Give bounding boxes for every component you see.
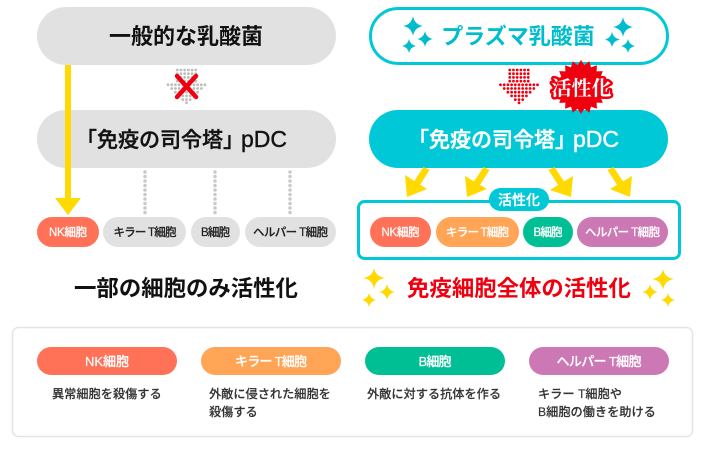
legend: killer T cell: 殺傷する [209,404,258,419]
cell pills: partial activation [37,217,336,247]
pill: helper T cell: ヘルパー T細胞 [253,225,328,239]
pill: helper T cell [245,217,336,247]
pill: NK cell [37,217,99,247]
pill: helper T cell: ヘルパー T細胞 [585,225,660,239]
pill: pDC activated: pDC [573,126,619,152]
result heading: whole activation: 免疫細胞全体の活性化 [407,276,631,301]
heading pill: plasma lactic acid bacteria: プラズマ乳酸菌 [441,24,595,49]
legend: killer T cell: 外敵に侵された細胞を [209,386,331,401]
pill: pDC: 「免疫の司令塔」 [76,129,244,152]
legend: helper T cell: B細胞の働きを助ける [538,404,656,419]
legend: NK cell: NK細胞 [85,354,129,369]
pill: pDC activated [369,110,668,168]
pill: killer T cell [436,217,519,247]
badge: activation starburst [552,60,612,114]
heading pill: general lactic acid bacteria: 一般的な乳酸菌 [109,24,263,49]
arrows: yellow arrows to cells [405,167,632,197]
legend: B cell: B細胞 [418,354,452,369]
legend: helper T cell: キラー T細胞や [538,386,622,401]
pill: NK cell: NK細胞 [382,225,420,239]
legend: killer T cell: キラー T細胞 [235,354,307,369]
pill: B cell: B細胞 [534,225,563,239]
label: activated [489,188,549,211]
arrow: yellow arrow to NK cell [55,65,81,215]
icon: sparkles left [402,16,433,53]
pill: pDC [37,110,336,168]
panel: general lactic acid bacteria [37,7,336,301]
result heading: partial activation: 一部の細胞のみ活性化 [74,276,298,301]
pill: NK cell: NK細胞 [49,225,88,239]
frame: activated cells [358,188,680,258]
legend: helper T cell: ヘルパー T細胞 [556,354,642,369]
pill: pDC: pDC [241,126,287,152]
legend: NK cell [37,347,177,401]
legend: B cell [365,347,505,401]
icon: red dotted arrow [500,70,538,103]
legend: NK cell: 異常細胞を殺傷する [52,386,162,401]
label: activated: 活性化 [498,192,540,208]
icon: yellow sparkles right [642,269,675,307]
heading pill: plasma lactic acid bacteria [370,8,668,64]
heading pill: general lactic acid bacteria [37,7,336,65]
badge: activation starburst: 活性化 [552,77,612,100]
pill: NK cell [370,217,431,247]
pill: pDC activated: 「免疫の司令塔」 [408,129,576,152]
panel: plasma lactic acid bacteria [358,8,680,307]
icon: sparkles right [605,17,635,53]
legend: B cell: 外敵に対する抗体を作る [367,386,501,401]
pill: helper T cell [577,217,668,247]
pill: B cell [191,217,240,247]
pill: B cell: B細胞 [201,225,230,239]
panel: legend [12,328,692,436]
pill: killer T cell [103,217,186,247]
pill: killer T cell: キラー T細胞 [114,225,177,239]
icon: blocked dotted arrow [168,70,205,103]
legend: killer T cell [201,347,341,419]
icon: yellow sparkles left [362,268,395,307]
pill: B cell [523,217,573,247]
pill: killer T cell: キラー T細胞 [446,225,510,239]
dotted connectors [145,172,290,214]
legend: helper T cell [529,347,669,419]
